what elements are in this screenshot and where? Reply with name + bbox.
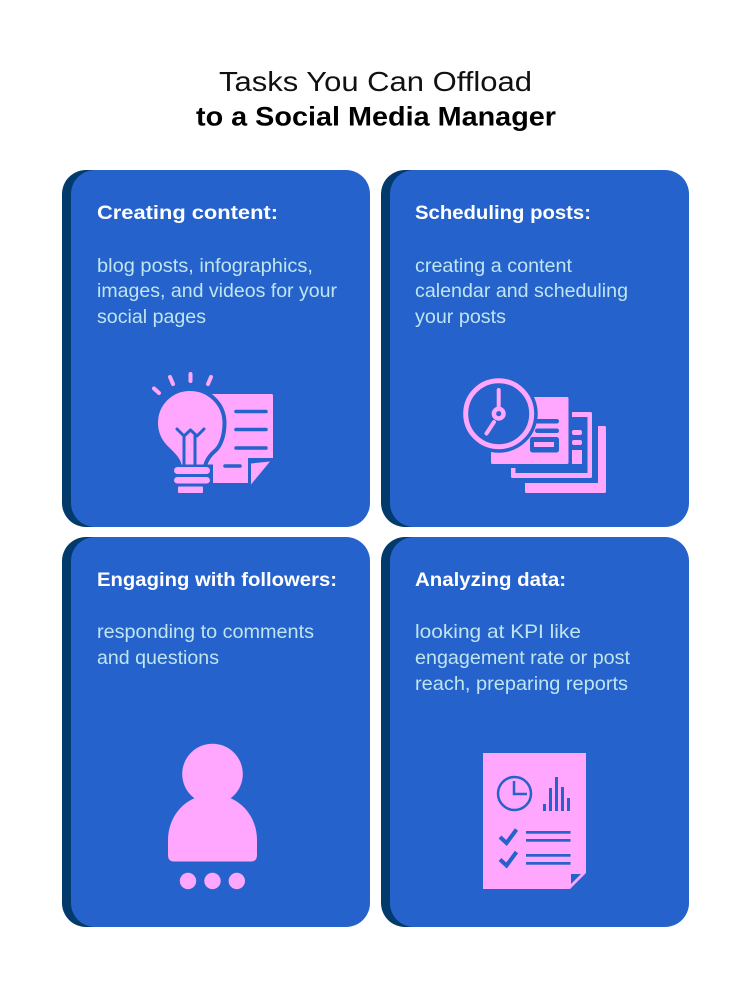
text: analyzing description: reach, preparing reports (415, 673, 628, 695)
text: analyzing description: looking at KPI like (415, 621, 581, 643)
panel: analyzing data (381, 537, 689, 927)
icon: report document (483, 753, 586, 889)
heading: creating content: Creating content: (97, 203, 278, 224)
title: to a Social Media Manager (196, 102, 557, 132)
text: engaging description: and questions (97, 647, 219, 669)
icon: light bulb and note (154, 374, 273, 494)
text: engaging description: responding to comments (97, 621, 314, 643)
text: scheduling posts description: your posts (415, 306, 506, 328)
title (196, 66, 557, 132)
text: scheduling posts description (415, 255, 628, 328)
text: creating content description: social pages (97, 306, 206, 328)
heading: analyzing data: Analyzing data: (415, 570, 566, 591)
icon: person with dots (168, 744, 257, 889)
text: creating content description: images, and videos for your (97, 280, 338, 302)
heading: scheduling posts: Scheduling posts: (415, 203, 591, 224)
text: scheduling posts description: calendar and scheduling (415, 280, 628, 302)
text: analyzing description: engagement rate or post (415, 647, 631, 669)
text: scheduling posts description: creating a content (415, 255, 573, 277)
text: analyzing description (415, 621, 631, 695)
text: engaging description (97, 621, 314, 669)
text: creating content description (97, 255, 338, 328)
text: creating content description: blog posts, infographics, (97, 255, 313, 277)
heading: engaging with followers: Engaging with followers: (97, 570, 337, 591)
icon: clock and stacked documents (460, 375, 606, 493)
panel: scheduling posts (381, 170, 689, 527)
title: Tasks You Can Offload (219, 66, 532, 97)
panel: engaging with followers (62, 537, 370, 927)
panel: creating content (62, 170, 370, 527)
